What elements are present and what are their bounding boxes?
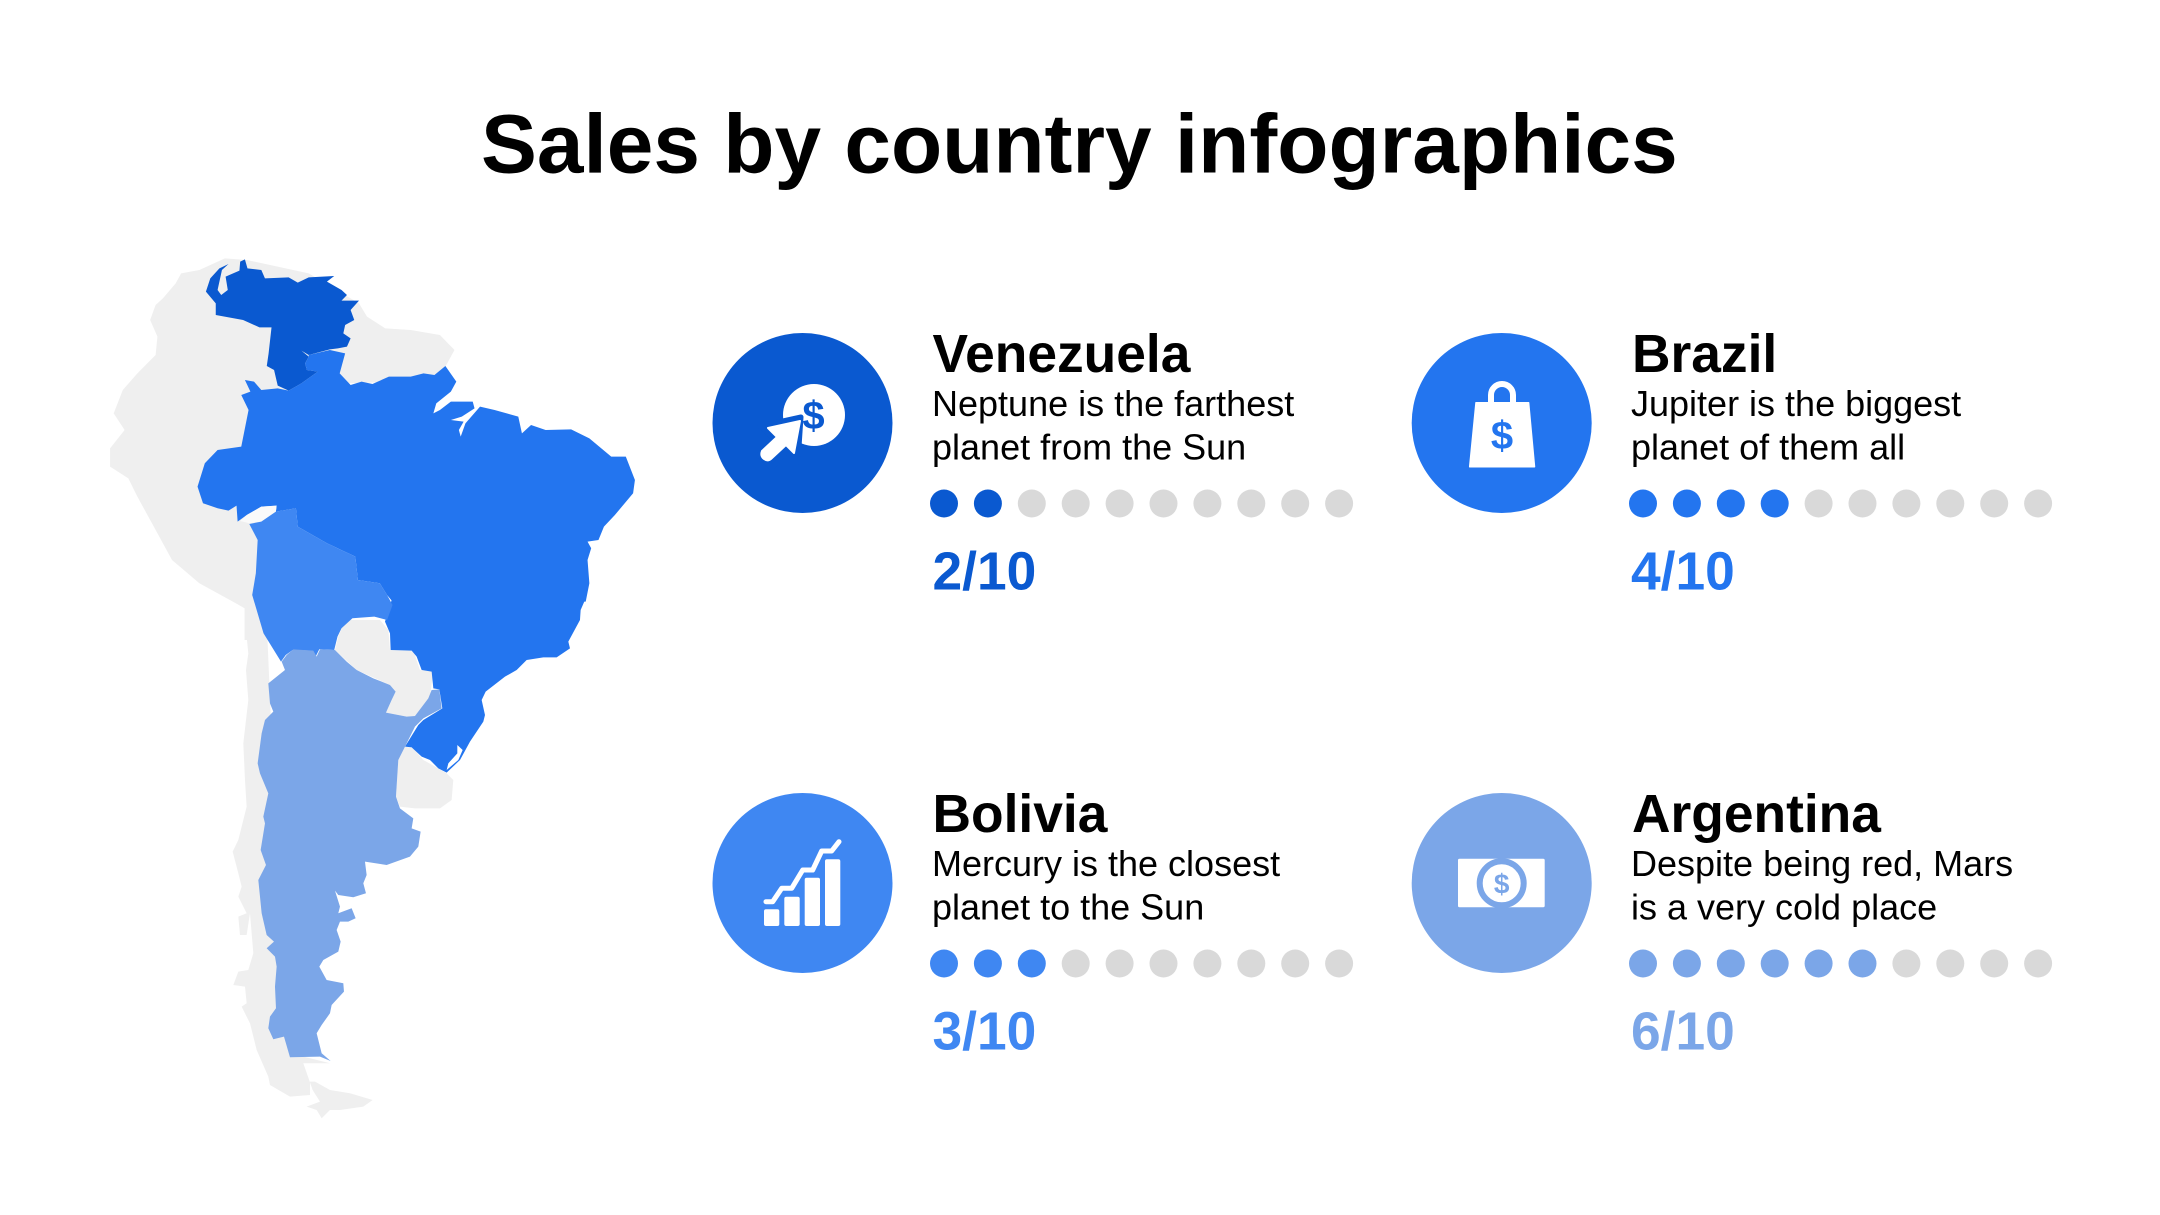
description: Neptune is the farthest bbox=[932, 383, 1294, 424]
description: Jupiter is the biggest bbox=[1631, 383, 1961, 424]
title: Sales by country infographics bbox=[481, 96, 1678, 190]
panel: Bolivia bbox=[712, 785, 1353, 1062]
map: Venezuela bbox=[206, 259, 359, 391]
description: planet from the Sun bbox=[932, 426, 1246, 468]
description: planet of them all bbox=[1631, 426, 1905, 468]
score: 2/10 bbox=[932, 542, 1036, 602]
description: is a very cold place bbox=[1631, 886, 1937, 928]
icon: coin and cursor arrow bbox=[712, 333, 892, 513]
map: other countries in grey bbox=[110, 258, 455, 1118]
icon: shopping bag bbox=[1412, 333, 1592, 513]
map: Bolivia bbox=[249, 508, 393, 662]
icon: shopping bag: $ bbox=[1491, 414, 1513, 458]
heading: Venezuela bbox=[932, 325, 1191, 384]
icon: banknote bbox=[1412, 793, 1592, 973]
score: 4/10 bbox=[1631, 542, 1735, 602]
icon: banknote: $ bbox=[1494, 868, 1510, 900]
description: Mercury is the closest bbox=[932, 843, 1280, 884]
rating dots bbox=[930, 950, 1353, 978]
map: Argentina bbox=[258, 649, 442, 1061]
heading: Bolivia bbox=[932, 785, 1108, 844]
score: 3/10 bbox=[932, 1002, 1036, 1062]
icon: growth chart bbox=[712, 793, 892, 973]
panel: Argentina bbox=[1412, 785, 2052, 1062]
map: South America bbox=[110, 258, 635, 1118]
rating dots bbox=[1629, 490, 2052, 518]
score: 6/10 bbox=[1631, 1002, 1735, 1062]
heading: Argentina bbox=[1632, 785, 1881, 844]
description: planet to the Sun bbox=[932, 886, 1204, 928]
map: gap between Brazil and Bolivia bbox=[240, 506, 277, 523]
rating dots bbox=[930, 490, 1353, 518]
icon: coin and cursor arrow: $ bbox=[802, 394, 825, 438]
map: Brazil bbox=[198, 350, 635, 773]
panel: Venezuela bbox=[712, 325, 1353, 602]
heading: Brazil bbox=[1632, 325, 1777, 384]
panel: Brazil bbox=[1412, 325, 2052, 602]
rating dots bbox=[1629, 950, 2052, 978]
description: Despite being red, Mars bbox=[1631, 843, 2013, 884]
